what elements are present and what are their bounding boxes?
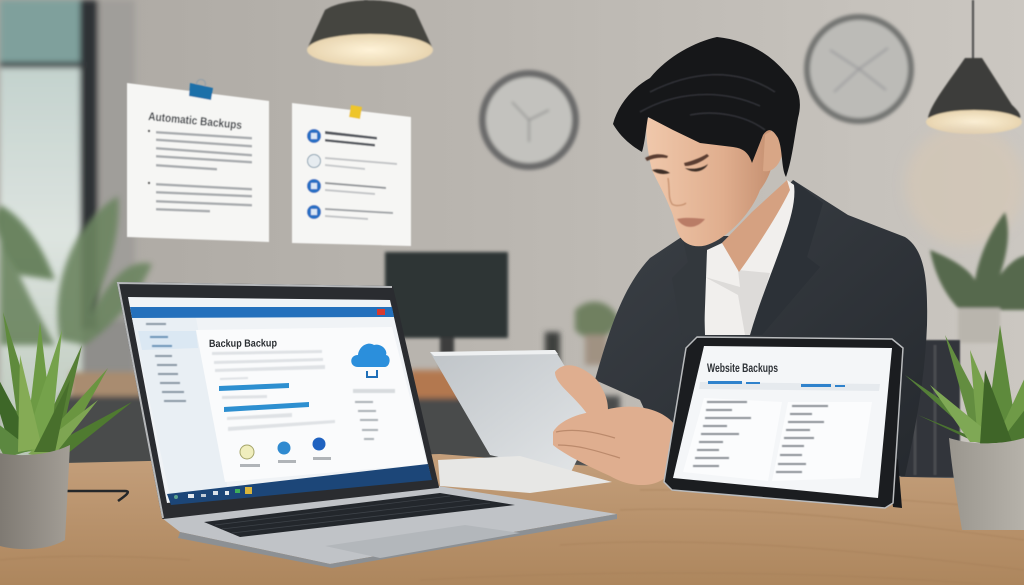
warm wall glow [905, 125, 1024, 245]
laptop base [162, 486, 617, 564]
laptop [118, 283, 617, 568]
man in dark blazer [595, 37, 927, 476]
placeholder lines [212, 350, 335, 431]
hair highlights [640, 75, 775, 130]
leaves [905, 375, 1000, 442]
background chair [900, 340, 960, 478]
wall clock right [804, 14, 914, 124]
notepad on table [438, 456, 612, 493]
hands [553, 365, 677, 485]
eyes and brows [645, 154, 709, 174]
nose and mouth [668, 178, 686, 206]
face [646, 118, 774, 246]
note card: Automatic Backups [127, 80, 269, 242]
tablet heading: Website Backups [707, 363, 778, 375]
tablet screen [673, 346, 892, 498]
standing tablet: Website Backups [664, 337, 903, 508]
heading: Automatic Backups [148, 111, 242, 132]
progress bars [219, 383, 309, 412]
tablet stand [885, 440, 902, 508]
neck [722, 180, 790, 272]
wall clock centre [479, 70, 579, 170]
note card: feature list [292, 103, 411, 246]
hand-held silver tablet [430, 350, 597, 474]
taskbar [167, 464, 432, 505]
blue binder clip [189, 80, 213, 100]
list icons [307, 129, 321, 219]
blazer [595, 180, 927, 476]
side stats [353, 389, 395, 440]
sidebar menu [146, 323, 186, 402]
laptop lid [118, 283, 438, 518]
cloud icon [351, 344, 390, 377]
background plant left [0, 196, 152, 345]
sidebar [132, 318, 228, 497]
trackpad [325, 525, 520, 558]
tablet list columns [683, 398, 782, 481]
tablet header bars [699, 382, 880, 391]
white shirt [704, 180, 797, 335]
ear [763, 131, 783, 171]
background potted plant [575, 302, 620, 365]
laptop screen [128, 297, 430, 503]
bullet text [148, 130, 252, 212]
blazer lapels [750, 180, 823, 335]
browser bar [130, 307, 394, 318]
potted plant right [905, 325, 1024, 530]
laptop cable [66, 491, 128, 501]
yellow sticky tab [349, 105, 362, 119]
leaves [0, 370, 38, 452]
background plant right [930, 212, 1024, 343]
background monitor [385, 252, 508, 368]
pot [0, 445, 70, 549]
status icons [240, 438, 331, 467]
ceiling lamp right [926, 0, 1022, 134]
background shelf and furniture [60, 332, 620, 468]
screen heading: Backup Backup [209, 337, 277, 350]
pot [949, 436, 1024, 530]
hair [613, 37, 800, 177]
table [0, 454, 1024, 585]
potted plant left [0, 312, 132, 549]
main panel [196, 327, 427, 482]
keyboard [204, 493, 515, 537]
ceiling lamp left [307, 0, 433, 66]
list text [325, 131, 397, 220]
window [0, 0, 135, 480]
